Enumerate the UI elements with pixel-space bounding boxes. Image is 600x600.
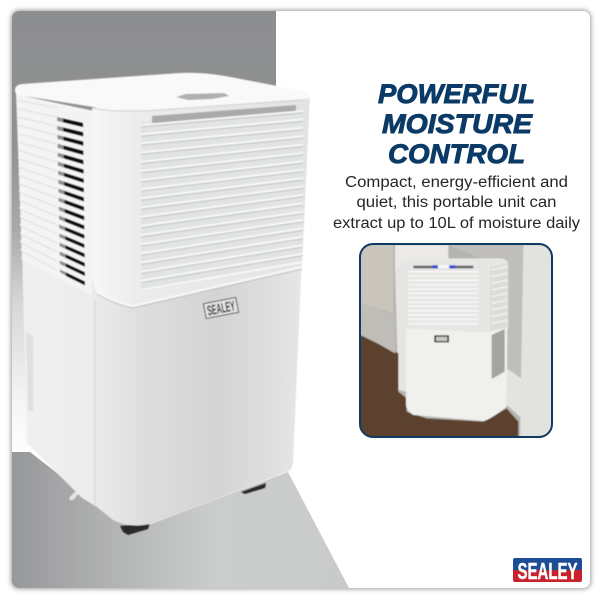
lower body side <box>22 250 97 507</box>
title <box>378 79 535 169</box>
front louvre field <box>141 104 305 292</box>
side handle recess <box>26 332 33 412</box>
body seam <box>94 300 96 505</box>
small unit status strip <box>413 266 473 268</box>
top vent slot <box>152 105 296 124</box>
inset border <box>360 244 552 437</box>
upper body side <box>16 94 92 296</box>
description text: Compact, energy-efficient and <box>345 174 568 191</box>
description text: quiet, this portable unit can <box>356 194 556 211</box>
room wall <box>361 245 542 436</box>
skirting board <box>360 303 395 353</box>
inset photo of unit in a room <box>357 242 557 442</box>
upper body front <box>92 96 310 307</box>
door frame <box>520 245 553 438</box>
top lid <box>15 73 310 110</box>
small unit badge <box>434 335 449 342</box>
floor <box>360 335 518 438</box>
grey wall panel <box>12 11 276 414</box>
floor panel <box>12 452 349 588</box>
dehumidifier product <box>15 73 310 535</box>
title: MOISTURE <box>382 109 533 139</box>
small unit louvres <box>408 272 478 324</box>
drain spout <box>69 481 82 501</box>
lid edge shadow <box>93 100 304 111</box>
wheels and feet <box>120 483 266 535</box>
small unit upper body <box>400 258 508 332</box>
small unit lower body <box>406 328 507 421</box>
title: CONTROL <box>388 139 525 169</box>
lid control panel <box>176 93 229 100</box>
description text: extract up to 10L of moisture daily <box>333 215 580 232</box>
lower body front <box>95 255 302 526</box>
description text <box>333 174 580 232</box>
small unit spec label <box>492 329 505 379</box>
side louvres <box>17 97 92 292</box>
side vent dark slot <box>57 114 85 288</box>
upper body lip <box>97 267 302 306</box>
SEALEY badge: SEALEY <box>206 297 237 319</box>
front louvres <box>141 111 303 290</box>
lid seam <box>97 269 302 308</box>
title: POWERFUL <box>378 79 535 109</box>
SEALEY badge <box>203 297 239 319</box>
